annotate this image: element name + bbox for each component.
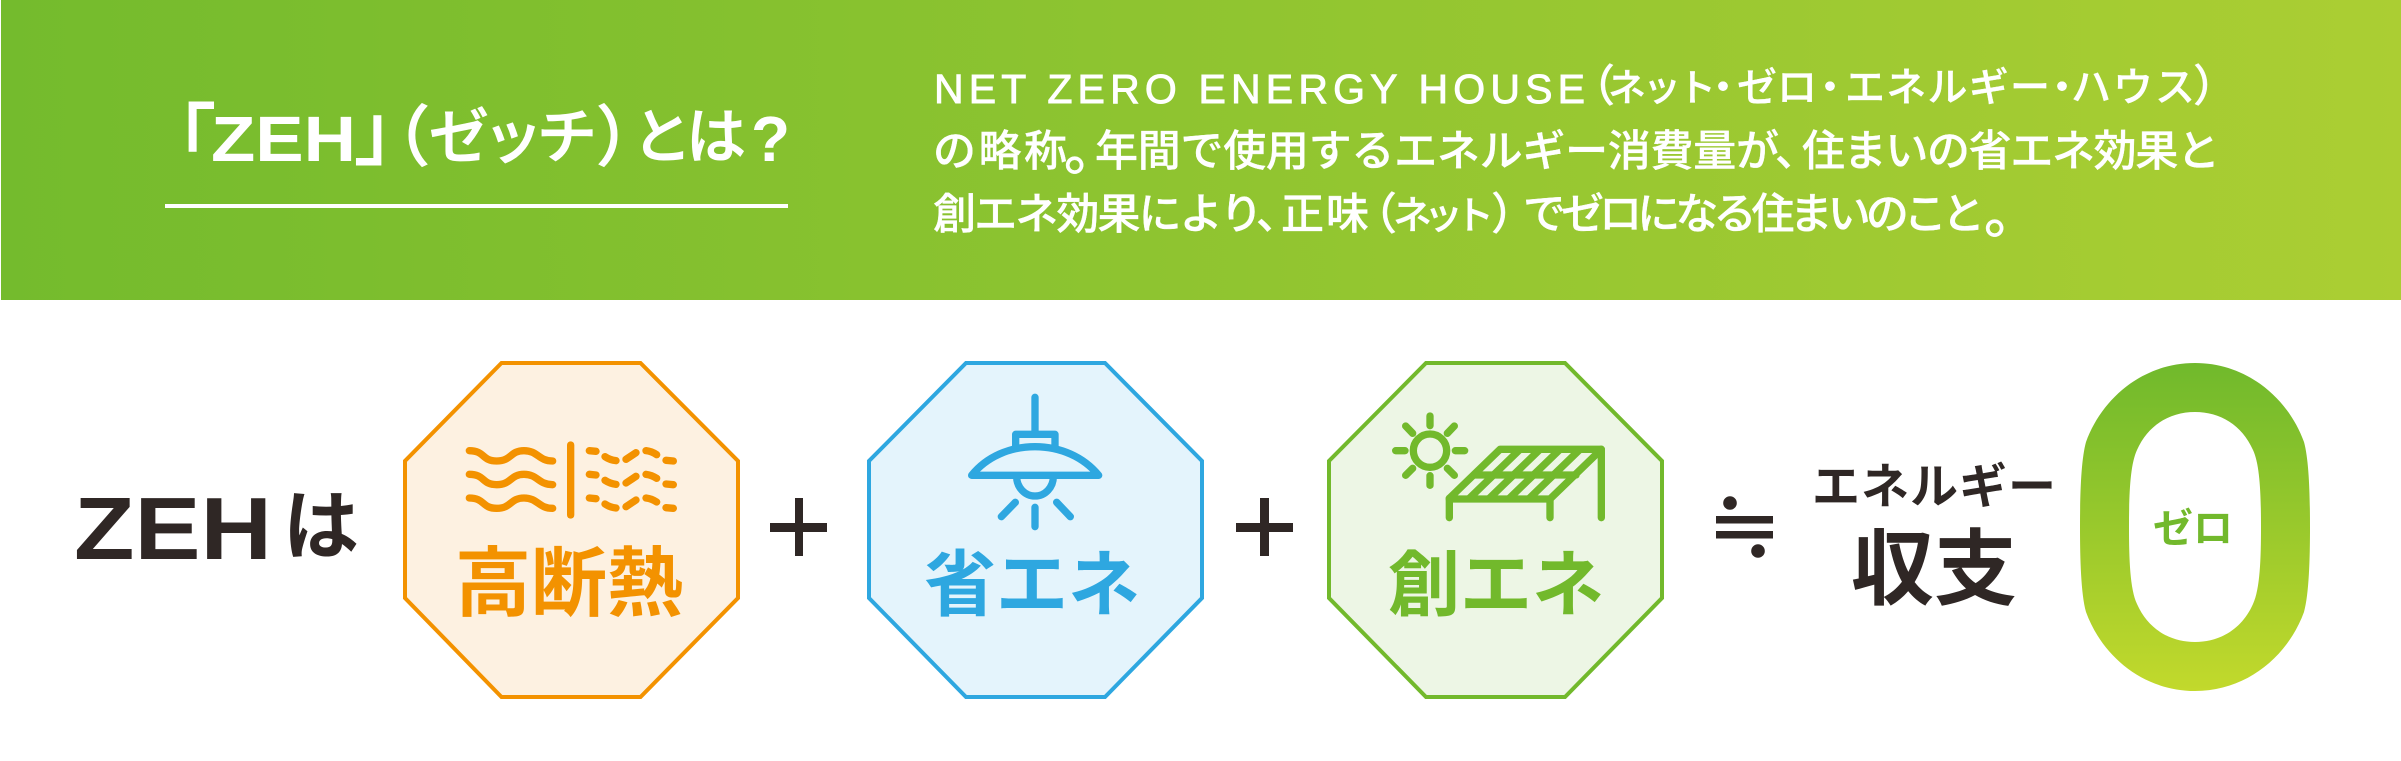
heading: ZEHとは: とは xyxy=(632,89,746,176)
heading: ZEHとは: （ xyxy=(364,84,430,180)
label: ZEHは: ZEH xyxy=(74,479,272,578)
heading: ZEHとは: ） xyxy=(596,84,662,180)
description text: 年間で使用するエネルギー消費量が xyxy=(1095,117,1779,179)
heading underline xyxy=(165,204,788,208)
label: ZEHは: は xyxy=(283,465,359,575)
heading: ZEHとは: ゼッチ xyxy=(429,89,597,176)
panel: 高断熱 xyxy=(405,363,738,697)
label: エネルギー収支: エネルギー xyxy=(1812,447,2056,517)
label: 省エネ text: 省エネ xyxy=(924,526,1140,631)
description text: 創エネ効果により xyxy=(933,180,1263,242)
description text: ネット xyxy=(1393,185,1494,241)
graphic: zero ring xyxy=(2080,363,2310,691)
description text: ・ xyxy=(2042,55,2082,113)
label: ゼロ text: ゼロ xyxy=(2153,496,2233,554)
description text: NET ZERO ENERGY HOUSE xyxy=(934,66,1585,112)
panel: 省エネ xyxy=(869,363,1202,697)
description text: （ xyxy=(1571,50,1615,114)
label: 高断熱 text: 高断熱 xyxy=(455,522,683,632)
icon: sun and solar panel xyxy=(1396,416,1601,518)
description text: ） xyxy=(2193,50,2237,114)
heading: ZEHとは: 「 xyxy=(140,79,216,189)
description text: ） xyxy=(1491,178,1535,242)
description text: （ xyxy=(1353,178,1397,242)
heading: ZEHとは: ? xyxy=(751,103,790,175)
panel: 創エネ xyxy=(1329,363,1662,697)
description text: エネルギー xyxy=(1845,55,2050,113)
label: ZEHは xyxy=(74,465,359,578)
description text: 、 xyxy=(1775,117,1818,179)
description text: ・ xyxy=(1810,55,1850,113)
description text: ゼロ xyxy=(1737,55,1817,113)
description text: 住まいの省エネ効果と xyxy=(1802,117,2220,179)
operator: nearly equal xyxy=(1716,496,1773,558)
heading: ZEHとは: 」 xyxy=(354,70,430,180)
description text: 。 xyxy=(1064,106,1119,186)
description text: ネット xyxy=(1608,57,1716,112)
description text: でゼロになる住まいのこと xyxy=(1523,180,1985,242)
label: エネルギー収支 xyxy=(1812,447,2056,622)
heading: ZEHとは xyxy=(140,70,790,189)
description text xyxy=(933,50,2237,249)
heading: ZEHとは: ZEH xyxy=(211,103,356,175)
description text: 、 xyxy=(1256,180,1299,242)
label: 創エネ text: 創エネ xyxy=(1388,526,1604,631)
header band xyxy=(1,0,2401,300)
icon: insulation wall with waves xyxy=(469,445,673,515)
icon: pendant lamp xyxy=(972,397,1099,527)
description text: ・ xyxy=(1703,55,1743,113)
description text: 。 xyxy=(1984,169,2039,249)
description text: ハウス xyxy=(2071,55,2195,113)
description text: の略称 xyxy=(933,117,1067,179)
operator: plus 1 xyxy=(770,498,827,556)
description text: 正味 xyxy=(1281,180,1369,242)
label: エネルギー収支: 収支 xyxy=(1851,502,2017,622)
operator: plus 2 xyxy=(1236,498,1293,556)
